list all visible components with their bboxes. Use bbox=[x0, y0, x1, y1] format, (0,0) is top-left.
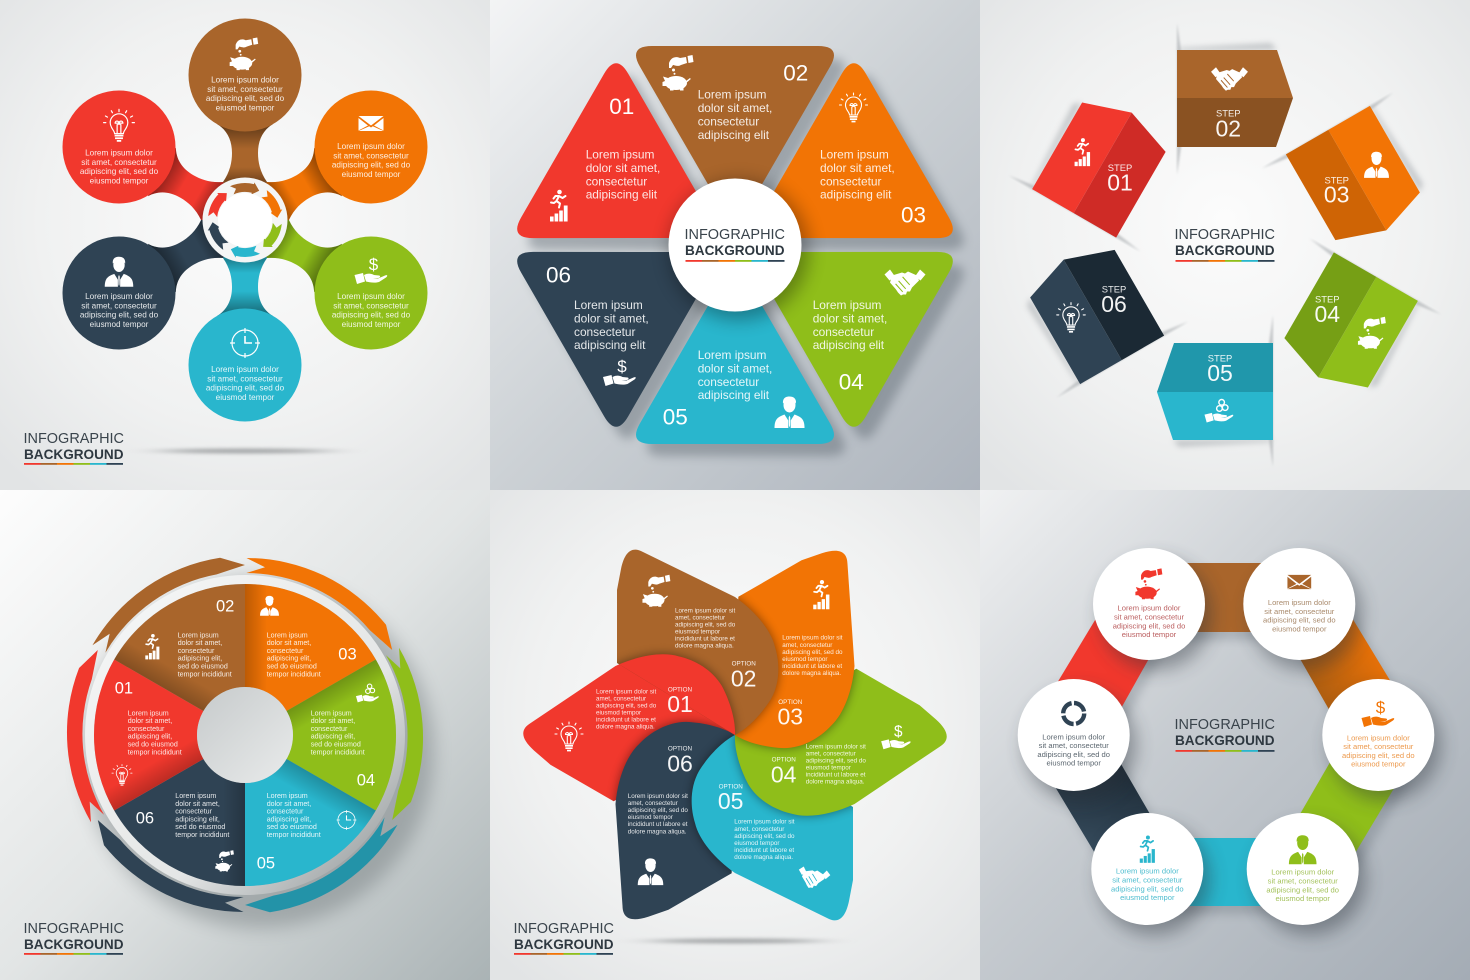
text: navy circle: adipiscing elit, sed do bbox=[1037, 750, 1110, 759]
outer ring bbox=[90, 580, 400, 890]
icon: businessman bbox=[638, 858, 663, 885]
text: circle green: sit amet, consectetur bbox=[333, 301, 409, 310]
text: circle teal: sit amet, consectetur bbox=[207, 374, 283, 383]
text 06: dolore magna aliqua. bbox=[628, 828, 687, 835]
text 04: dolor sit amet, bbox=[311, 717, 355, 725]
text 03: dolor sit amet, bbox=[820, 161, 895, 175]
text: circle navy: Lorem ipsum dolor bbox=[85, 292, 153, 301]
text 02: dolor sit amet, bbox=[698, 101, 772, 115]
icon: hand with dollar bbox=[354, 255, 387, 284]
option labels: 06 bbox=[667, 751, 693, 777]
panel: hexagon ribbon with circles bbox=[980, 490, 1470, 980]
icon: cycle bbox=[1063, 703, 1084, 724]
heading bbox=[1174, 226, 1275, 262]
step labels: STEP bbox=[1102, 284, 1126, 295]
numbers: 03 bbox=[338, 645, 357, 663]
text 05: incididunt ut labore et bbox=[734, 847, 794, 854]
hexagon triangles bbox=[513, 46, 957, 444]
text 03: Lorem ipsum dolor sit bbox=[782, 635, 843, 642]
text 06: adipiscing elit, sed do bbox=[628, 807, 688, 814]
text 05: dolor sit amet, bbox=[698, 361, 772, 375]
icon: piggy bank bbox=[662, 55, 694, 90]
option labels: 01 bbox=[667, 691, 693, 717]
text: navy circle: eiusmod tempor bbox=[1046, 759, 1101, 768]
text 02: consectetur bbox=[698, 114, 759, 128]
text: circle teal: Lorem ipsum dolor bbox=[211, 365, 279, 374]
numbers: 05 bbox=[663, 404, 688, 429]
numbers: 04 bbox=[357, 771, 375, 789]
text 06: dolor sit amet, bbox=[574, 311, 649, 325]
heading: BACKGROUND bbox=[685, 242, 784, 258]
text 01: adipiscing elit, sed do bbox=[596, 702, 657, 709]
text 02: amet, consectetur bbox=[675, 614, 725, 621]
text: circle green: adipiscing elit, sed do bbox=[332, 311, 411, 320]
text 06: consectetur bbox=[175, 808, 213, 816]
central circle shadow bbox=[669, 180, 809, 320]
text: green circle: sit amet, consectetur bbox=[1268, 876, 1338, 886]
heading bbox=[1174, 716, 1275, 752]
text 03: amet, consectetur bbox=[782, 642, 832, 649]
icon: light bulb bbox=[1057, 303, 1085, 333]
icon: light bulb bbox=[112, 764, 132, 786]
icon: hand with dollar bbox=[881, 724, 911, 749]
text 05: consectetur bbox=[698, 375, 759, 389]
icon: businessman bbox=[774, 396, 804, 428]
text: orange circle: Lorem ipsum dolor bbox=[1347, 733, 1410, 742]
text: circle brown: sit amet, consectetur bbox=[207, 85, 283, 94]
numbers: 06 bbox=[136, 810, 154, 828]
step labels: 05 bbox=[1207, 360, 1233, 386]
text 03: dolore magna aliqua. bbox=[782, 670, 841, 677]
text 03: eiusmod tempor bbox=[782, 656, 827, 663]
text 04: adipiscing elit, sed do bbox=[806, 757, 866, 764]
text: circle red: adipiscing elit, sed do bbox=[80, 167, 159, 176]
text: circle brown: adipiscing elit, sed do bbox=[206, 94, 285, 103]
text: circle red: Lorem ipsum dolor bbox=[85, 148, 153, 158]
text 01: dolore magna aliqua. bbox=[596, 724, 655, 731]
icon: clock bbox=[230, 328, 260, 358]
icon: clock bbox=[337, 810, 356, 830]
text 03: incididunt ut labore et bbox=[782, 663, 842, 670]
text: circle orange: eiusmod tempor bbox=[342, 170, 401, 179]
text 06: Lorem ipsum bbox=[574, 298, 643, 312]
icon: light bulb bbox=[840, 93, 868, 122]
text 04: consectetur bbox=[813, 325, 874, 339]
text 01: amet, consectetur bbox=[596, 695, 646, 702]
text: orange circle: eiusmod tempor bbox=[1351, 760, 1406, 769]
text 04: eiusmod tempor bbox=[806, 764, 851, 771]
ribbon shadow bbox=[1051, 571, 1411, 914]
text 02: Lorem ipsum dolor sit bbox=[675, 607, 735, 614]
heading: BACKGROUND bbox=[1175, 732, 1274, 748]
text 01: sed do eiusmod bbox=[128, 740, 178, 748]
central circle bbox=[668, 178, 802, 312]
text 03: adipiscing elit bbox=[820, 188, 892, 202]
text 01: adipiscing elit bbox=[586, 188, 658, 202]
option labels bbox=[667, 661, 803, 814]
option labels: 05 bbox=[718, 788, 743, 814]
text 04: Lorem ipsum bbox=[311, 709, 352, 717]
text 03: consectetur bbox=[820, 174, 882, 188]
text 02: dolor sit amet, bbox=[178, 639, 222, 647]
text 01: adipiscing elit, bbox=[128, 733, 172, 741]
text: circle navy: sit amet, consectetur bbox=[81, 301, 157, 310]
text 04: adipiscing elit bbox=[813, 338, 885, 352]
heading: BACKGROUND bbox=[24, 446, 124, 462]
text: navy circle: Lorem ipsum dolor bbox=[1042, 732, 1106, 741]
option labels: OPTION bbox=[668, 746, 693, 753]
text: green circle: eiusmod tempor bbox=[1275, 894, 1330, 903]
text 03: Lorem ipsum bbox=[267, 631, 308, 639]
text 02: adipiscing elit, bbox=[178, 655, 222, 663]
text 02: sed do eiusmod bbox=[178, 662, 228, 670]
circle shadows bbox=[1024, 558, 1441, 935]
icon: envelope bbox=[1287, 575, 1311, 589]
text: green circle: adipiscing elit, sed do bbox=[1266, 885, 1339, 894]
text: circle navy: adipiscing elit, sed do bbox=[80, 311, 159, 320]
text 06: Lorem ipsum bbox=[175, 792, 216, 800]
icon: piggy bank bbox=[1135, 568, 1162, 599]
text: circle green: eiusmod tempor bbox=[342, 320, 401, 329]
numbers bbox=[115, 598, 375, 873]
icon: piggy bank bbox=[230, 37, 258, 70]
heading: INFOGRAPHIC bbox=[1174, 716, 1275, 733]
text 05: Lorem ipsum dolor sit bbox=[734, 819, 795, 826]
panel: donut with circular arrows bbox=[0, 490, 490, 980]
text 02: Lorem ipsum bbox=[698, 88, 767, 102]
text 03: adipiscing elit, sed do bbox=[782, 649, 843, 656]
text 02: adipiscing elit, sed do bbox=[675, 621, 736, 628]
text 03: adipiscing elit, bbox=[267, 655, 311, 663]
option labels: OPTION bbox=[732, 661, 756, 668]
option labels: 02 bbox=[731, 665, 756, 691]
numbers bbox=[546, 60, 926, 429]
icon: hand with flower bbox=[1204, 400, 1233, 423]
numbers: 02 bbox=[216, 598, 234, 616]
step labels: 04 bbox=[1315, 301, 1340, 327]
heading: BACKGROUND bbox=[514, 936, 614, 952]
icon: hand with dollar bbox=[603, 357, 636, 386]
text 06: adipiscing elit bbox=[574, 338, 646, 352]
text: red circle: eiusmod tempor bbox=[1122, 630, 1177, 639]
heading: INFOGRAPHIC bbox=[24, 430, 124, 447]
step labels: STEP bbox=[1208, 353, 1232, 364]
text 04: dolor sit amet, bbox=[813, 311, 887, 325]
text 06: incididunt ut labore et bbox=[628, 821, 688, 828]
centre hole bbox=[197, 687, 293, 783]
heading bbox=[24, 430, 124, 465]
icon: piggy bank bbox=[1358, 317, 1386, 349]
icon: businessman bbox=[260, 596, 279, 616]
text: brown circle: sit amet, consectetur bbox=[1264, 607, 1335, 616]
text: circle orange: sit amet, consectetur bbox=[333, 151, 409, 160]
text 03: dolor sit amet, bbox=[267, 639, 311, 647]
text: orange circle: adipiscing elit, sed do bbox=[1342, 751, 1415, 760]
text 05: adipiscing elit, bbox=[267, 815, 311, 823]
flower petals bbox=[515, 540, 955, 930]
folded pieces bbox=[999, 23, 1451, 467]
text 05: adipiscing elit, sed do bbox=[734, 833, 795, 840]
heading: INFOGRAPHIC bbox=[684, 226, 785, 243]
text 02: eiusmod tempor bbox=[675, 628, 720, 635]
option labels: OPTION bbox=[668, 686, 693, 693]
text 05: sed do eiusmod bbox=[267, 823, 317, 831]
text 06: dolor sit amet, bbox=[175, 800, 220, 808]
panel: swirled flower options bbox=[490, 490, 980, 980]
panel: hexagon of triangles bbox=[490, 0, 980, 490]
text: teal circle: adipiscing elit, sed do bbox=[1111, 884, 1184, 893]
numbers: 06 bbox=[546, 263, 571, 288]
white circles bbox=[1018, 548, 1434, 925]
text 03: sed do eiusmod bbox=[267, 662, 317, 670]
text: brown circle: eiusmod tempor bbox=[1272, 624, 1327, 633]
step labels: 06 bbox=[1101, 291, 1127, 317]
text 06: adipiscing elit, bbox=[175, 815, 220, 823]
text: teal circle: Lorem ipsum dolor bbox=[1116, 867, 1179, 876]
text 06: tempor incididunt bbox=[175, 831, 229, 839]
text 02: tempor incididunt bbox=[178, 670, 232, 678]
text: circle brown: Lorem ipsum dolor bbox=[211, 76, 279, 84]
heading: INFOGRAPHIC bbox=[24, 920, 124, 937]
icon: light bulb bbox=[555, 722, 583, 751]
heading bbox=[684, 226, 785, 262]
text 03: tempor incididunt bbox=[267, 670, 321, 678]
ground shadow bbox=[160, 448, 330, 454]
panel: folded paper steps bbox=[980, 0, 1470, 490]
step labels: STEP bbox=[1108, 162, 1132, 173]
text 01: tempor incididunt bbox=[128, 748, 182, 756]
icon: handshake bbox=[796, 866, 831, 891]
text 06: Lorem ipsum dolor sit bbox=[628, 793, 688, 800]
icon: businessman bbox=[1364, 152, 1389, 178]
text 02: dolore magna aliqua. bbox=[675, 643, 734, 650]
text: brown circle: adipiscing elit, sed do bbox=[1263, 616, 1336, 625]
donut segments bbox=[49, 546, 441, 924]
text 05: dolore magna aliqua. bbox=[734, 854, 793, 861]
text: teal circle: eiusmod tempor bbox=[1120, 893, 1175, 902]
triangle shadows bbox=[524, 58, 968, 456]
text 01: dolor sit amet, bbox=[586, 161, 660, 175]
drop shadow bbox=[82, 576, 434, 928]
text 06: amet, consectetur bbox=[628, 800, 678, 807]
heading: BACKGROUND bbox=[24, 936, 124, 952]
text 01: Lorem ipsum bbox=[586, 148, 655, 162]
heading bbox=[514, 920, 614, 955]
text 01: Lorem ipsum dolor sit bbox=[596, 688, 656, 695]
text: teal circle: sit amet, consectetur bbox=[1112, 876, 1183, 884]
heading: INFOGRAPHIC bbox=[514, 920, 614, 937]
icon: businessman bbox=[105, 257, 133, 287]
text: circle green: Lorem ipsum dolor bbox=[337, 292, 405, 301]
icon: runner bbox=[145, 634, 159, 659]
text 06: consectetur bbox=[574, 325, 636, 339]
icon: hand with flower bbox=[356, 684, 379, 702]
text: circle orange: Lorem ipsum dolor bbox=[337, 142, 405, 151]
panel: metaball petals bbox=[0, 0, 490, 490]
text 04: dolore magna aliqua. bbox=[806, 779, 865, 786]
text 01: eiusmod tempor bbox=[596, 709, 641, 716]
text: circle navy: eiusmod tempor bbox=[90, 320, 149, 329]
text: circle brown: eiusmod tempor bbox=[216, 104, 275, 113]
text 04: Lorem ipsum dolor sit bbox=[806, 743, 866, 750]
icon: piggy bank bbox=[642, 575, 670, 607]
text 01: Lorem ipsum bbox=[128, 709, 169, 717]
text 05: dolor sit amet, bbox=[267, 800, 311, 808]
numbers: 05 bbox=[257, 855, 275, 873]
step labels: 03 bbox=[1324, 181, 1349, 207]
numbers: 01 bbox=[115, 679, 133, 697]
icon: piggy bank bbox=[215, 850, 234, 872]
text: navy circle: sit amet, consectetur bbox=[1039, 741, 1109, 750]
text: circle orange: adipiscing elit, sed do bbox=[332, 161, 411, 170]
ground shadow bbox=[650, 938, 820, 944]
text 04: Lorem ipsum bbox=[813, 298, 882, 312]
heading: BACKGROUND bbox=[1175, 242, 1274, 258]
icon: runner bbox=[550, 190, 568, 222]
text: orange circle: sit amet, consectetur bbox=[1343, 742, 1414, 751]
text 06: sed do eiusmod bbox=[175, 823, 225, 831]
heading: INFOGRAPHIC bbox=[1174, 226, 1275, 243]
numbers: 01 bbox=[609, 94, 634, 119]
text: brown circle: Lorem ipsum dolor bbox=[1268, 598, 1331, 607]
text 04: adipiscing elit, bbox=[311, 733, 355, 741]
text 05: amet, consectetur bbox=[734, 826, 784, 833]
text 01: consectetur bbox=[128, 725, 165, 733]
text 04: consectetur bbox=[311, 725, 348, 733]
icon: envelope bbox=[358, 116, 384, 131]
text 04: tempor incididunt bbox=[311, 748, 365, 756]
text 03: Lorem ipsum bbox=[820, 148, 889, 162]
numbers: 02 bbox=[783, 60, 808, 85]
step labels: 02 bbox=[1216, 115, 1241, 141]
step labels bbox=[1101, 108, 1349, 386]
icon: handshake bbox=[884, 270, 926, 296]
text 04: incididunt ut labore et bbox=[806, 772, 866, 778]
text 02: Lorem ipsum bbox=[178, 631, 219, 639]
text 02: incididunt ut labore et bbox=[675, 636, 735, 642]
numbers: 04 bbox=[839, 369, 864, 394]
text: red circle: sit amet, consectetur bbox=[1114, 612, 1185, 622]
text 05: tempor incididunt bbox=[267, 831, 321, 839]
text 02: consectetur bbox=[178, 647, 215, 655]
icon: hand with dollar bbox=[1362, 698, 1394, 727]
text 05: adipiscing elit bbox=[698, 388, 770, 402]
icon: runner bbox=[1075, 138, 1090, 166]
text: circle teal: eiusmod tempor bbox=[216, 393, 275, 402]
text 06: eiusmod tempor bbox=[628, 814, 673, 821]
text: red circle: adipiscing elit, sed do bbox=[1113, 621, 1185, 630]
text: red circle: Lorem ipsum dolor bbox=[1118, 604, 1181, 613]
text 04: amet, consectetur bbox=[806, 750, 856, 757]
text 02: adipiscing elit bbox=[698, 128, 770, 142]
text: circle red: eiusmod tempor bbox=[90, 177, 149, 186]
text 05: Lorem ipsum bbox=[698, 348, 767, 362]
text 05: Lorem ipsum bbox=[267, 792, 308, 800]
icon: businessman bbox=[1289, 835, 1316, 864]
option labels: 03 bbox=[778, 704, 803, 730]
text: green circle: Lorem ipsum dolor bbox=[1271, 868, 1335, 877]
step labels: STEP bbox=[1216, 108, 1241, 119]
text 01: dolor sit amet, bbox=[128, 717, 172, 725]
metaball diagram bbox=[62, 18, 428, 422]
step labels: STEP bbox=[1324, 174, 1349, 185]
text 01: incididunt ut labore et bbox=[596, 716, 656, 724]
text 05: consectetur bbox=[267, 808, 304, 816]
text: circle red: sit amet, consectetur bbox=[81, 158, 157, 167]
text: circle teal: adipiscing elit, sed do bbox=[206, 384, 285, 393]
icon: light bulb bbox=[104, 109, 134, 142]
heading bbox=[24, 920, 124, 955]
option labels: OPTION bbox=[778, 699, 803, 706]
option labels: 04 bbox=[771, 762, 797, 788]
step labels: STEP bbox=[1315, 294, 1340, 305]
icon: runner bbox=[1140, 835, 1155, 863]
text 05: eiusmod tempor bbox=[734, 840, 779, 847]
ribbons bbox=[1045, 563, 1405, 906]
numbers: 03 bbox=[901, 203, 926, 228]
text 01: consectetur bbox=[586, 174, 647, 188]
text 03: consectetur bbox=[267, 647, 304, 655]
text 04: sed do eiusmod bbox=[311, 740, 361, 748]
option labels: OPTION bbox=[772, 757, 796, 764]
circular arrows bbox=[18, 519, 472, 951]
icon: handshake bbox=[1211, 67, 1248, 91]
step labels: 01 bbox=[1107, 170, 1133, 196]
icon: runner bbox=[813, 580, 829, 609]
option labels: OPTION bbox=[719, 783, 743, 790]
